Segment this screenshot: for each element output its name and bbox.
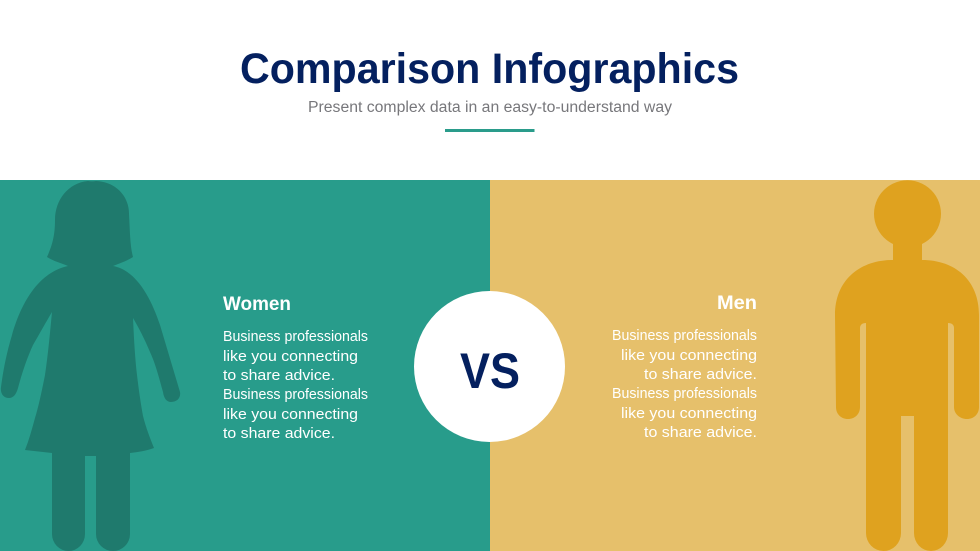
- title: Comparison Infographics: [240, 46, 739, 93]
- text block: women: to share advice.: [223, 367, 335, 384]
- icon: man silhouette: [835, 180, 979, 551]
- subtitle: Present complex data in an easy-to-understand way: [308, 99, 672, 116]
- text block: women: Business professionals: [223, 328, 368, 345]
- panel: men: [490, 180, 980, 551]
- text block: men: like you connecting: [621, 347, 757, 364]
- icon: woman silhouette: [1, 181, 180, 551]
- heading: men: Men: [717, 293, 757, 314]
- text block: men: Business professionals: [612, 385, 757, 402]
- heading: women: Women: [223, 294, 291, 315]
- text block: men: to share advice.: [644, 424, 757, 441]
- text block: women: Business professionals: [223, 386, 368, 403]
- text block: women: to share advice.: [223, 425, 335, 442]
- text block: men: [612, 327, 757, 441]
- text block: men: like you connecting: [621, 405, 757, 422]
- text block: women: [223, 328, 368, 442]
- VS badge: VS: [460, 343, 520, 399]
- title underline: [445, 129, 534, 132]
- VS badge: [414, 291, 565, 442]
- text block: men: to share advice.: [644, 366, 757, 383]
- text block: men: Business professionals: [612, 327, 757, 344]
- text block: women: like you connecting: [223, 406, 358, 423]
- panel: women: [0, 180, 490, 551]
- text block: women: like you connecting: [223, 348, 358, 365]
